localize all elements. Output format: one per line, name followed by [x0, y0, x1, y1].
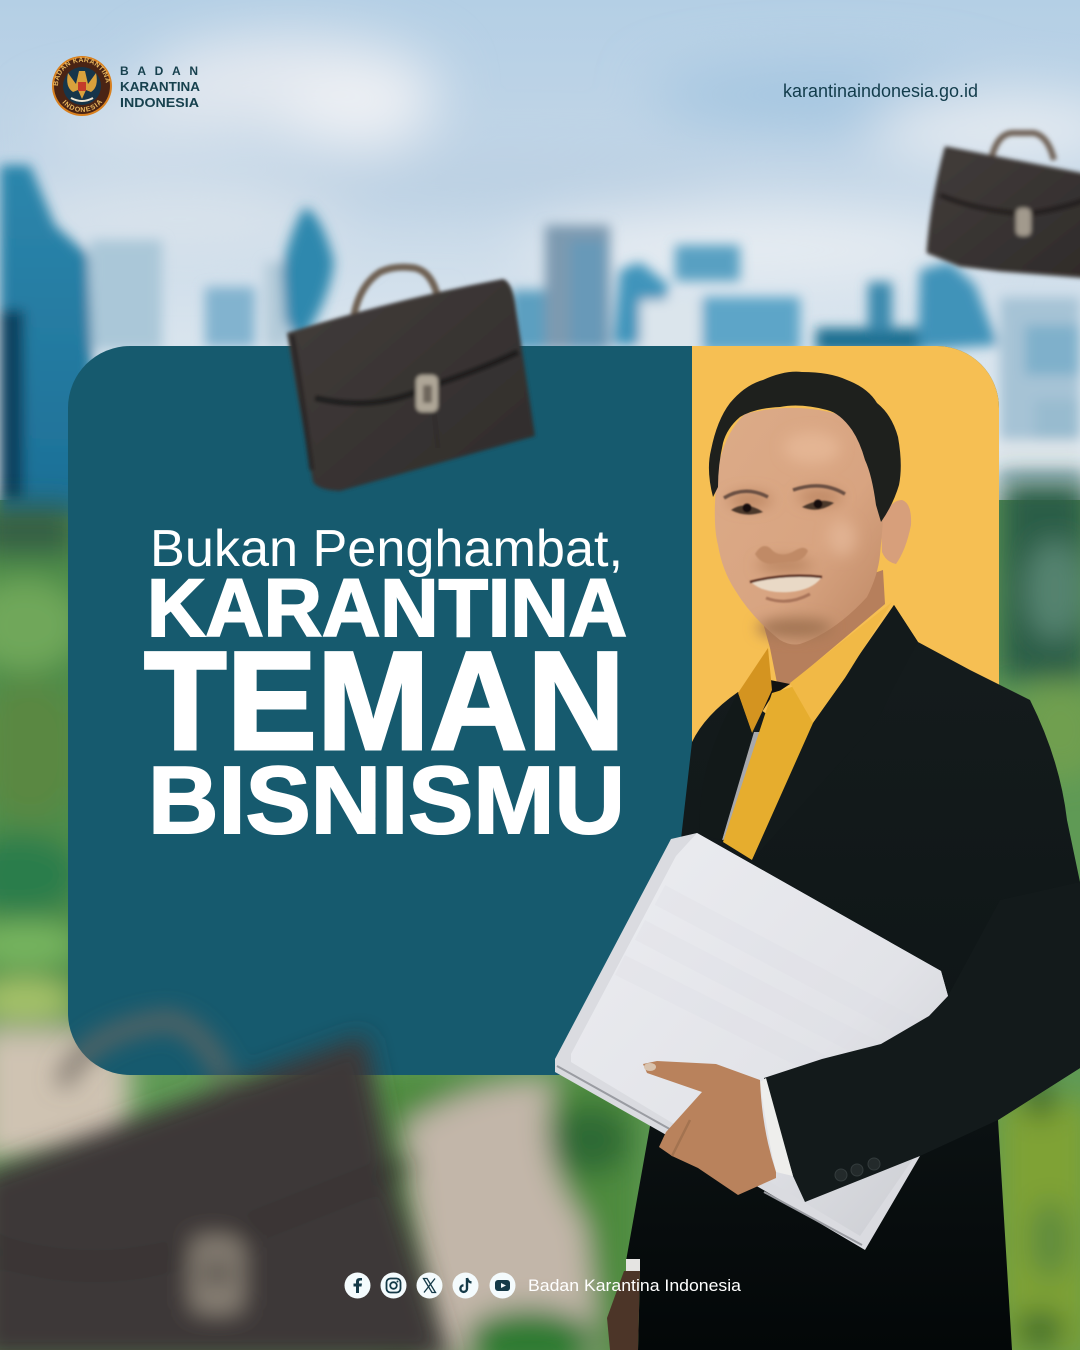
eyes and brows: [724, 486, 845, 515]
smile: [750, 576, 822, 601]
panel: teal card: [68, 346, 999, 1075]
logo: Badan Karantina Indonesia: [52, 56, 201, 116]
logo wordmark: [120, 64, 201, 110]
icon: briefcase top right: [928, 133, 1080, 277]
shirt collar left: [738, 648, 772, 733]
footer account name: Badan Karantina Indonesia: [528, 1276, 742, 1295]
suit jacket body: [626, 605, 1080, 1350]
heading: title: [144, 520, 627, 854]
jacket sleeve: [764, 882, 1080, 1202]
icon: large blurred briefcase bottom left: [0, 1020, 450, 1350]
shirt cuff: [760, 1078, 793, 1176]
left wrist and cuff: [607, 1259, 640, 1350]
icon: instagram: [380, 1272, 406, 1298]
icon: X: [416, 1272, 442, 1298]
neck: [760, 570, 885, 688]
social media footer: [344, 1272, 742, 1298]
title line: KARANTINA: KARANTINA: [147, 563, 627, 654]
icon: youtube: [490, 1272, 516, 1298]
face: [715, 408, 884, 644]
title line: TEMAN: TEMAN: [144, 622, 625, 779]
logo emblem: [52, 56, 112, 116]
logo wordmark: BADAN: [120, 64, 198, 78]
document stack: [555, 833, 948, 1250]
title line: BISNISMU: BISNISMU: [148, 747, 625, 854]
yellow shirt front: [723, 686, 815, 860]
nose: [755, 546, 808, 564]
icon: facebook: [344, 1272, 370, 1298]
lapel left: [699, 693, 752, 840]
icon: tiktok: [452, 1272, 478, 1298]
website address: karantinaindonesia.go.id: [783, 81, 978, 101]
title line: Bukan Penghambat: Bukan Penghambat,: [150, 520, 623, 578]
ear: [881, 500, 911, 564]
figure: smiling man in black suit holding documents: [555, 372, 1080, 1350]
logo wordmark: INDONESIA: [120, 95, 200, 110]
shirt collar right: [790, 602, 892, 723]
hand: [643, 1061, 776, 1195]
grey undershirt: [722, 732, 762, 840]
sleeve buttons: [835, 1158, 880, 1181]
dark shirt gap: [762, 680, 790, 712]
logo emblem: INDONESIA: [62, 100, 102, 112]
logo wordmark: KARANTINA: [120, 79, 201, 94]
hair: [709, 372, 901, 522]
face shading: [728, 432, 856, 638]
logo emblem: BADAN KARANTINA: [53, 57, 110, 86]
icon: briefcase over card: [287, 267, 535, 491]
lapel right: [752, 605, 918, 860]
panel: yellow card section: [692, 346, 999, 742]
